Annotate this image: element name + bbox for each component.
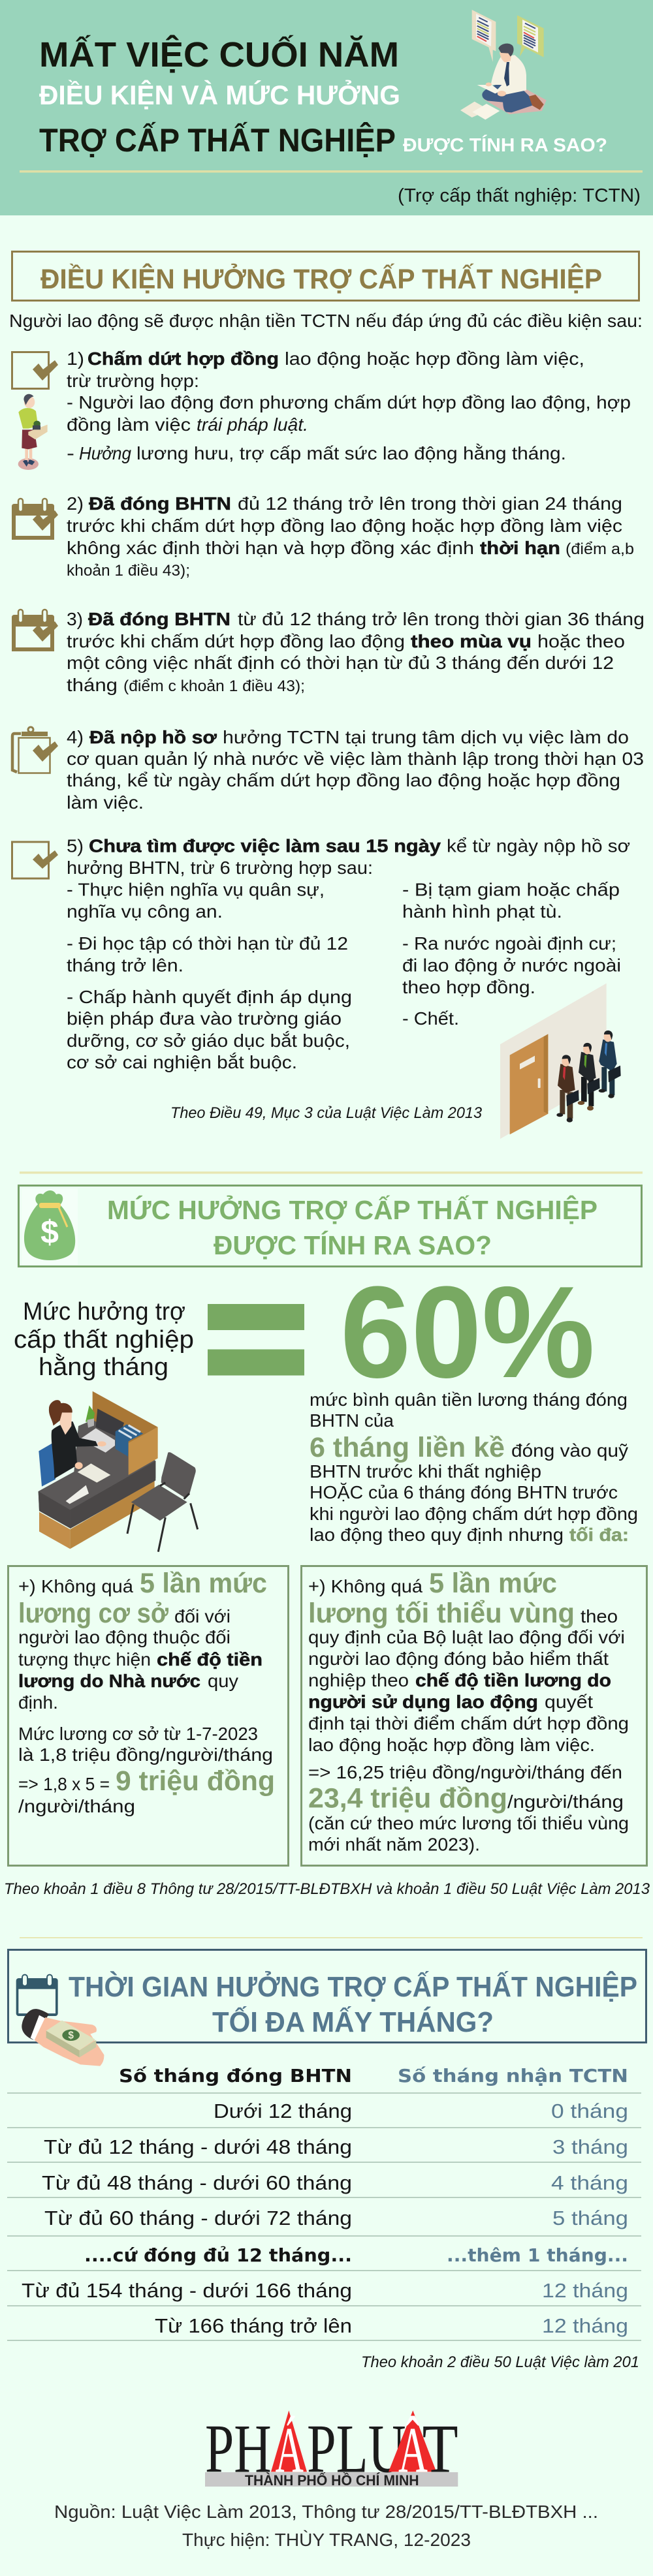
- row 3: [42, 2171, 628, 2194]
- exceptions left column: - Đi học tập có thời hạn từ đủ 12: [67, 933, 348, 954]
- exceptions left column: biện pháp đưa vào trường giáo: [67, 1008, 342, 1029]
- condition 2 text: khoản 1 điều 43);: [67, 562, 190, 580]
- equals sign: [208, 1304, 304, 1376]
- panel: regional minimum wage cap: quyết: [545, 1692, 593, 1712]
- person 2: [578, 1043, 600, 1111]
- panel: base salary cap: chế độ tiền: [157, 1649, 263, 1669]
- condition 5 text: hưởng BHTN, trừ 6 trường hợp sau:: [67, 858, 373, 878]
- panel: base salary cap: lương do Nhà nước: [18, 1671, 200, 1691]
- exceptions right column: theo hợp đồng.: [402, 977, 535, 997]
- panel: base salary cap: quy: [208, 1671, 238, 1691]
- row 2: Từ đủ 12 tháng - dưới 48 tháng: [44, 2135, 352, 2158]
- panel: regional minimum wage cap: chế độ tiền lương do: [415, 1670, 611, 1690]
- illustration: office worker at a desk: [39, 1391, 198, 1552]
- condition 1 text: lao động hoặc hợp đồng làm việc,: [285, 349, 584, 369]
- intro text: Người lao động sẽ được nhận tiền TCTN nếu đáp ứng đủ các điều kiện sau:: [9, 311, 643, 331]
- legal note 3: Theo khoản 2 điều 50 Luật Việc làm 201: [361, 2353, 639, 2371]
- condition 5 text: Chưa tìm được việc làm sau 15 ngày: [89, 835, 441, 856]
- credits: Nguồn: Luật Việc Làm 2013, Thông tư 28/2015/TT-BLĐTBXH ...: [54, 2502, 598, 2522]
- panel: regional minimum wage cap: người lao động đóng bảo hiểm thất: [308, 1649, 609, 1669]
- condition 2 text: [67, 493, 634, 580]
- condition 1 text: - Người lao động đơn phương chấm dứt hợp đồng lao động, hợp: [67, 392, 631, 412]
- panel: base salary cap: tượng thực hiện: [18, 1649, 151, 1669]
- title line 1: MẤT VIỆC CUỐI NĂM: [39, 35, 399, 74]
- panel: base salary cap: định.: [18, 1692, 58, 1713]
- condition 5 text: kể từ ngày nộp hồ sơ: [447, 835, 630, 856]
- explanation of the 60 percent base: mức bình quân tiền lương tháng đóng: [310, 1389, 628, 1410]
- condition 5 text: [67, 835, 630, 1072]
- condition 3 text: hoặc theo: [537, 631, 625, 651]
- explanation of the 60 percent base: HOẶC của 6 tháng đóng BHTN trước: [310, 1482, 618, 1502]
- table: months of contribution vs months of benefit: [7, 2065, 641, 2341]
- row 5: [84, 2244, 628, 2266]
- panel: regional minimum wage cap: nghiệp theo: [308, 1670, 409, 1690]
- abbreviation note: (Trợ cấp thất nghiệp: TCTN): [398, 185, 641, 206]
- condition 1 text: Hưởng: [79, 443, 131, 463]
- condition 2 text: thời hạn: [480, 538, 560, 558]
- panel: base salary cap: Mức lương cơ sở từ 1-7-2023: [18, 1724, 258, 1744]
- panel: regional minimum wage cap: 5 lần mức: [429, 1568, 557, 1599]
- exceptions left column: - Thực hiện nghĩa vụ quân sự,: [67, 880, 325, 899]
- row 7: Từ 166 tháng trở lên: [155, 2314, 352, 2337]
- row 6: [22, 2279, 628, 2302]
- logo: T: [422, 2410, 458, 2487]
- exceptions right column: đi lao động ở nước ngoài: [402, 955, 621, 975]
- exceptions right column: hành hình phạt tù.: [402, 901, 562, 922]
- illustration: people queueing at a door: [500, 984, 621, 1139]
- row 4: 5 tháng: [552, 2207, 628, 2229]
- table header: Số tháng đóng BHTN: [119, 2065, 352, 2087]
- condition 1 text: lương hưu, trợ cấp mất sức lao động hằng tháng.: [136, 443, 566, 463]
- row 1: [214, 2100, 628, 2122]
- panel: regional minimum wage cap: theo: [581, 1606, 618, 1626]
- logo: Â: [398, 2413, 428, 2486]
- explanation of the 60 percent base: [310, 1389, 638, 1545]
- panel: regional minimum wage cap: định tại thời điểm chấm dứt hợp đồng: [308, 1713, 629, 1733]
- condition 2 text: không xác định thời hạn và hợp đồng xác định: [67, 538, 474, 558]
- panel: base salary cap: +) Không quá: [18, 1576, 133, 1596]
- row 2: [44, 2135, 628, 2158]
- panel: regional minimum wage cap: 23,4 triệu đồng: [308, 1783, 507, 1814]
- formula label: Mức hưởng trợ: [23, 1298, 185, 1326]
- row 5: ....cứ đóng đủ 12 tháng...: [84, 2244, 352, 2266]
- condition 3 text: (điểm c khoản 1 điều 43);: [123, 677, 305, 695]
- row 5: ...thêm 1 tháng...: [447, 2244, 628, 2266]
- explanation of the 60 percent base: đóng vào quỹ: [511, 1440, 628, 1461]
- condition 4 text: 4): [67, 727, 84, 747]
- panel: regional minimum wage cap: +) Không quá: [308, 1576, 422, 1596]
- row 3: Từ đủ 48 tháng - dưới 60 tháng: [42, 2171, 352, 2194]
- exceptions left column: cơ sở cai nghiện bắt buộc.: [67, 1052, 297, 1072]
- condition 1 text: đồng làm việc: [67, 414, 191, 435]
- icon: woman holding a box: [18, 394, 48, 470]
- icon: money bag: [22, 1188, 78, 1265]
- condition 3 text: trước khi chấm dứt hợp đồng lao động: [67, 631, 405, 651]
- panel: regional minimum wage cap: (căn cứ theo mức lương tối thiểu vùng: [308, 1813, 629, 1833]
- condition 3 text: theo mùa vụ: [411, 631, 532, 651]
- icon: calendar check 3: [12, 610, 58, 651]
- condition 1 text: -: [67, 443, 74, 463]
- exceptions left column: nghĩa vụ công an.: [67, 901, 223, 922]
- row 1: Dưới 12 tháng: [214, 2100, 352, 2122]
- condition 2 text: 2): [67, 493, 84, 514]
- logo: Á: [276, 2413, 304, 2486]
- icon: calendar check 2: [12, 499, 58, 540]
- title line 2: ĐIỀU KIỆN VÀ MỨC HƯỞNG: [39, 79, 400, 110]
- condition 4 text: tháng, kể từ ngày chấm dứt hợp đồng lao động hoặc hợp đồng: [67, 770, 620, 790]
- formula label: [14, 1298, 194, 1381]
- condition 3 text: từ đủ 12 tháng trở lên trong thời gian 36 tháng: [238, 609, 645, 629]
- explanation of the 60 percent base: BHTN của: [310, 1410, 394, 1431]
- row 1: 0 tháng: [551, 2100, 628, 2122]
- condition 2 text: Đã đóng BHTN: [89, 493, 231, 514]
- panel: regional minimum wage cap: quy định của Bộ luật lao động đối với: [308, 1627, 625, 1647]
- logo: PH: [205, 2410, 272, 2487]
- condition 2 text: đủ 12 tháng trở lên trong thời gian 24 tháng: [238, 493, 622, 514]
- condition 3 text: 3): [67, 609, 83, 629]
- section 3 heading box: TỐI ĐA MẤY THÁNG?: [212, 2005, 494, 2038]
- row 2: 3 tháng: [552, 2135, 628, 2158]
- explanation of the 60 percent base: khi người lao động chấm dứt hợp đồng: [310, 1504, 638, 1524]
- condition 3 text: [67, 609, 645, 695]
- panel: base salary cap: 9 triệu đồng: [116, 1765, 275, 1797]
- title line 3: TRỢ CẤP THẤT NGHIỆP: [39, 122, 396, 159]
- section 1 heading box: [12, 252, 639, 300]
- explanation of the 60 percent base: lao động theo quy định nhưng: [310, 1525, 564, 1545]
- condition 3 text: tháng: [67, 675, 118, 695]
- panel: base salary cap: /người/tháng: [18, 1796, 135, 1816]
- logo: [205, 2410, 458, 2489]
- icon: calendar with hand holding cash: [16, 1975, 104, 2066]
- credits: Thực hiện: THÙY TRANG, 12-2023: [182, 2530, 471, 2550]
- condition 2 text: trước khi chấm dứt hợp đồng lao động hoặc hợp đồng làm việc: [67, 516, 622, 536]
- panel: regional minimum wage cap: mới nhất năm 2023).: [308, 1834, 480, 1855]
- exceptions left column: dưỡng, cơ sở giáo dục bắt buộc,: [67, 1031, 350, 1051]
- panel: base salary cap: đối với: [174, 1606, 231, 1626]
- row 4: Từ đủ 60 tháng - dưới 72 tháng: [44, 2207, 352, 2229]
- 60 percent figure: 60%: [340, 1260, 595, 1405]
- title line 3 suffix: ĐƯỢC TÍNH RA SAO?: [403, 134, 607, 156]
- icon: calendar with hand holding cash: $: [68, 2030, 74, 2041]
- exceptions right column: - Chết.: [402, 1008, 459, 1029]
- explanation of the 60 percent base: 6 tháng liền kề: [310, 1432, 505, 1463]
- section 1 heading box: ĐIỀU KIỆN HƯỞNG TRỢ CẤP THẤT NGHIỆP: [40, 263, 602, 295]
- condition 4 text: làm việc.: [67, 792, 144, 813]
- condition 5 text: 5): [67, 835, 84, 856]
- legal note 2: Theo khoản 1 điều 8 Thông tư 28/2015/TT-BLĐTBXH và khoản 1 điều 50 Luật Việc Làm 2013: [4, 1880, 650, 1898]
- condition 4 text: [67, 727, 644, 813]
- condition 4 text: Đã nộp hồ sơ: [89, 727, 217, 747]
- formula label: cấp thất nghiệp: [14, 1326, 194, 1354]
- section 2 heading box: ĐƯỢC TÍNH RA SAO?: [214, 1230, 492, 1260]
- header banner: [0, 0, 653, 215]
- table header: Số tháng nhận TCTN: [398, 2065, 628, 2087]
- credits: [54, 2502, 598, 2550]
- row 4: [44, 2207, 628, 2229]
- row 7: [155, 2314, 628, 2337]
- exceptions right column: - Ra nước ngoài định cư;: [402, 933, 616, 954]
- panel: regional minimum wage cap: lương tối thiểu vùng: [308, 1598, 575, 1629]
- row 7: 12 tháng: [542, 2314, 628, 2337]
- icon: checkbox 1: [12, 352, 58, 389]
- condition 3 text: Đã đóng BHTN: [88, 609, 231, 629]
- section 2 heading box: [18, 1185, 641, 1266]
- panel: base salary cap: lương cơ sở: [18, 1598, 168, 1629]
- person 3: [599, 1031, 621, 1098]
- condition 4 text: cơ quan quản lý nhà nước về việc làm thành lập trong thời hạn 03: [67, 749, 644, 769]
- panel: base salary cap: 5 lần mức: [140, 1568, 267, 1599]
- logo: THÀNH PHỐ HỒ CHÍ MINH: [245, 2472, 419, 2489]
- condition 1 text: Chấm dứt hợp đồng: [88, 349, 279, 369]
- exceptions right column: [402, 880, 621, 1029]
- condition 2 text: (điểm a,b: [565, 540, 634, 558]
- exceptions left column: tháng trở lên.: [67, 955, 183, 975]
- section 2 heading box: MỨC HƯỞNG TRỢ CẤP THẤT NGHIỆP: [107, 1195, 597, 1225]
- condition 1 text: trừ trường hợp:: [67, 371, 199, 391]
- formula label: hằng tháng: [39, 1353, 168, 1381]
- row 6: 12 tháng: [542, 2279, 628, 2302]
- logo: PLU: [307, 2410, 406, 2487]
- icon: money bag: $: [40, 1214, 59, 1250]
- legal note 1: Theo Điều 49, Mục 3 của Luật Việc Làm 2013: [170, 1104, 483, 1122]
- exceptions left column: - Chấp hành quyết định áp dụng: [67, 987, 352, 1007]
- panel: base salary cap: người lao động thuộc đối: [18, 1627, 231, 1647]
- condition 3 text: một công việc nhất định có thời hạn từ đủ 3 tháng đến dưới 12: [67, 653, 614, 673]
- icon: clipboard check: [12, 727, 58, 773]
- panel: regional minimum wage cap: /người/tháng: [507, 1792, 624, 1812]
- condition 1 text: [67, 349, 631, 463]
- explanation of the 60 percent base: tối đa:: [569, 1525, 629, 1545]
- panel: regional minimum wage cap: => 16,25 triệu đồng/người/tháng đến: [308, 1762, 622, 1782]
- section 3 heading box: [8, 1950, 646, 2043]
- icon: man reading documents: [460, 10, 547, 119]
- panel: regional minimum wage cap: [302, 1566, 646, 1865]
- icon: checkbox 5: [12, 842, 58, 878]
- panel: base salary cap: là 1,8 triệu đồng/người/tháng: [18, 1745, 273, 1765]
- panel: regional minimum wage cap: lao động hoặc hợp đồng làm việc.: [308, 1735, 595, 1755]
- row 3: 4 tháng: [551, 2171, 628, 2194]
- condition 1 text: trái pháp luật.: [197, 414, 308, 435]
- panel: regional minimum wage cap: người sử dụng lao động: [308, 1692, 538, 1712]
- table header: [119, 2065, 628, 2087]
- exceptions left column: [67, 880, 352, 1072]
- panel: base salary cap: => 1,8 x 5 =: [18, 1774, 110, 1794]
- exceptions right column: - Bị tạm giam hoặc chấp: [402, 880, 620, 899]
- person 1: [556, 1055, 579, 1123]
- row 6: Từ đủ 154 tháng - dưới 166 tháng: [22, 2279, 352, 2302]
- explanation of the 60 percent base: BHTN trước khi thất nghiệp: [310, 1461, 541, 1482]
- panel: base salary cap: [8, 1566, 289, 1865]
- condition 1 text: 1): [67, 349, 84, 369]
- condition 4 text: hưởng TCTN tại trung tâm dịch vụ việc làm do: [223, 727, 629, 747]
